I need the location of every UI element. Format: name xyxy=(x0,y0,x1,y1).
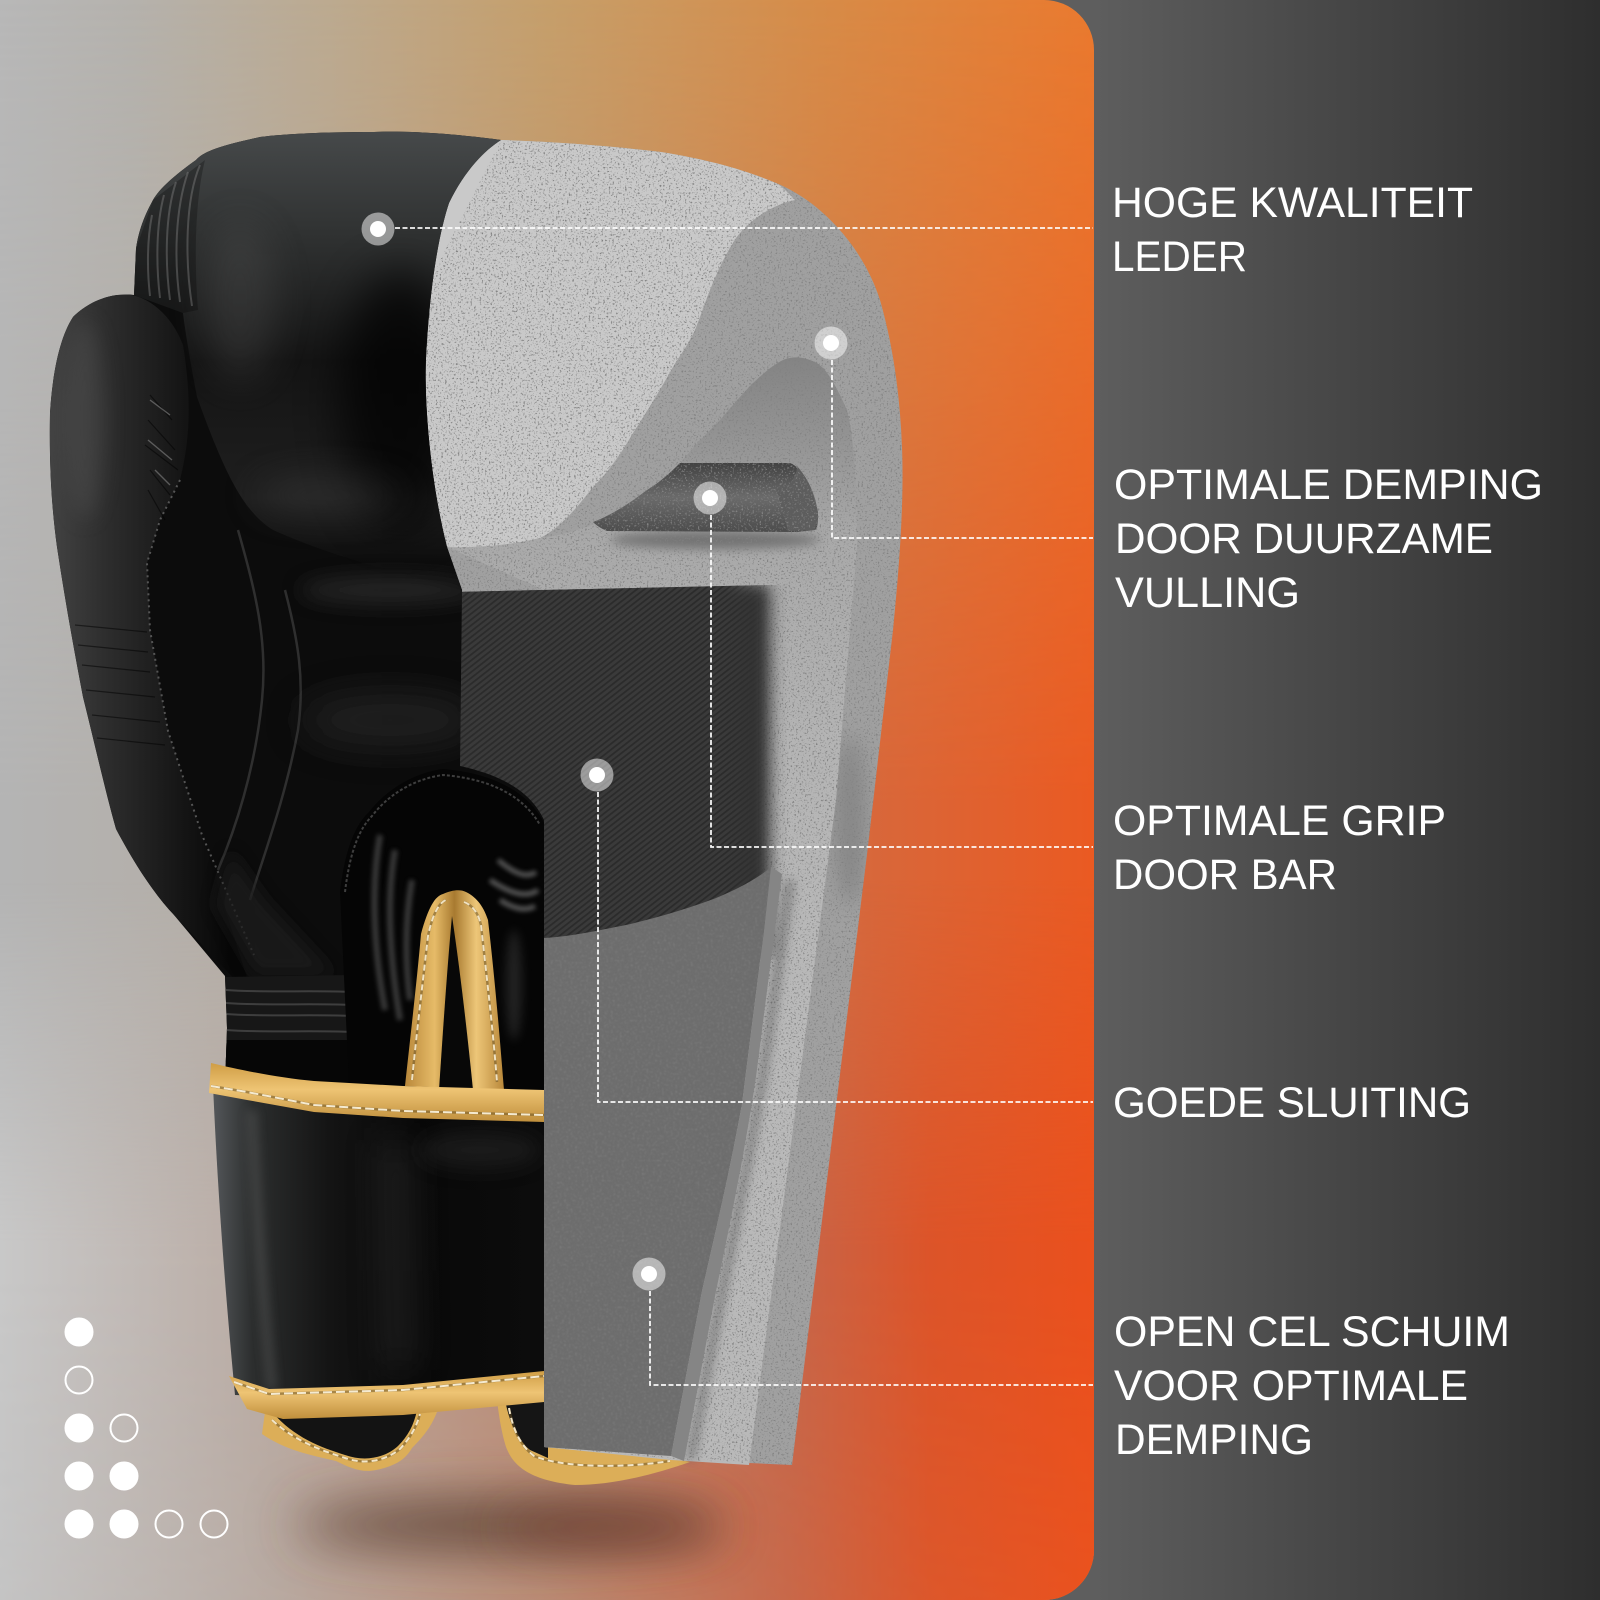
foam cross-section xyxy=(420,130,910,1470)
label: open cel schuim: DEMPING xyxy=(1115,1416,1313,1464)
inner plate edge xyxy=(671,867,782,1461)
label: goede sluiting: GOEDE SLUITING xyxy=(1113,1079,1471,1127)
light top foam xyxy=(420,140,795,547)
callout: filling xyxy=(814,326,1093,538)
dark grey open cell foam xyxy=(544,867,771,1456)
ground shadow under glove xyxy=(295,1501,725,1549)
thumb seam xyxy=(147,480,254,955)
callout: closure xyxy=(580,758,1093,1102)
palm seams xyxy=(218,530,301,900)
darker patch on outer shell xyxy=(834,735,866,905)
black wrist cuff xyxy=(213,1085,544,1400)
outer foam shell xyxy=(420,140,903,1465)
label: hoge kwaliteit leder xyxy=(1112,179,1473,281)
orange gradient panel xyxy=(0,0,1094,1600)
gold cuff trim upper xyxy=(209,1063,544,1122)
gold cuff trim lower xyxy=(229,1371,544,1419)
label: optimale demping: VULLING xyxy=(1115,569,1300,617)
callout: grip bar xyxy=(694,482,1093,847)
thumb panel xyxy=(50,294,188,926)
label: optimale demping xyxy=(1114,461,1543,617)
wrist ribbed strap xyxy=(224,975,352,1062)
pocket strap xyxy=(344,975,352,1062)
inner cavity layer xyxy=(447,357,857,1465)
thumb wrinkles xyxy=(75,395,178,745)
open cell foam texture xyxy=(544,883,758,1452)
stitched fabric grip area xyxy=(455,585,775,955)
callout: open cell foam xyxy=(632,1258,1093,1385)
leather base xyxy=(50,132,544,1105)
gold lower straps behind cross-section xyxy=(262,1400,690,1485)
label: optimale demping: OPTIMALE DEMPING xyxy=(1114,461,1543,509)
glove leather, left half xyxy=(50,125,544,1105)
label: optimale grip xyxy=(1113,797,1446,899)
upper fist panel xyxy=(130,125,510,600)
top finger ribs xyxy=(134,160,205,313)
palm sheen xyxy=(300,576,480,604)
grip bar slot xyxy=(593,463,820,549)
foam speckle texture xyxy=(420,130,910,1470)
label: open cel schuim xyxy=(1114,1308,1510,1464)
label: optimale grip: OPTIMALE GRIP xyxy=(1113,797,1446,845)
label: open cel schuim: OPEN CEL SCHUIM xyxy=(1114,1308,1510,1356)
label: open cel schuim: VOOR OPTIMALE xyxy=(1114,1362,1468,1410)
label: optimale demping: DOOR DUURZAME xyxy=(1115,515,1493,563)
label: optimale grip: DOOR BAR xyxy=(1113,851,1337,899)
rating dots xyxy=(65,1318,228,1538)
shadow beside inner plate xyxy=(690,880,790,1460)
gold closure loop xyxy=(405,890,504,1090)
label: hoge kwaliteit leder: LEDER xyxy=(1112,233,1247,281)
callout: leather xyxy=(362,212,1093,246)
label: hoge kwaliteit leder: HOGE KWALITEIT xyxy=(1112,179,1473,227)
